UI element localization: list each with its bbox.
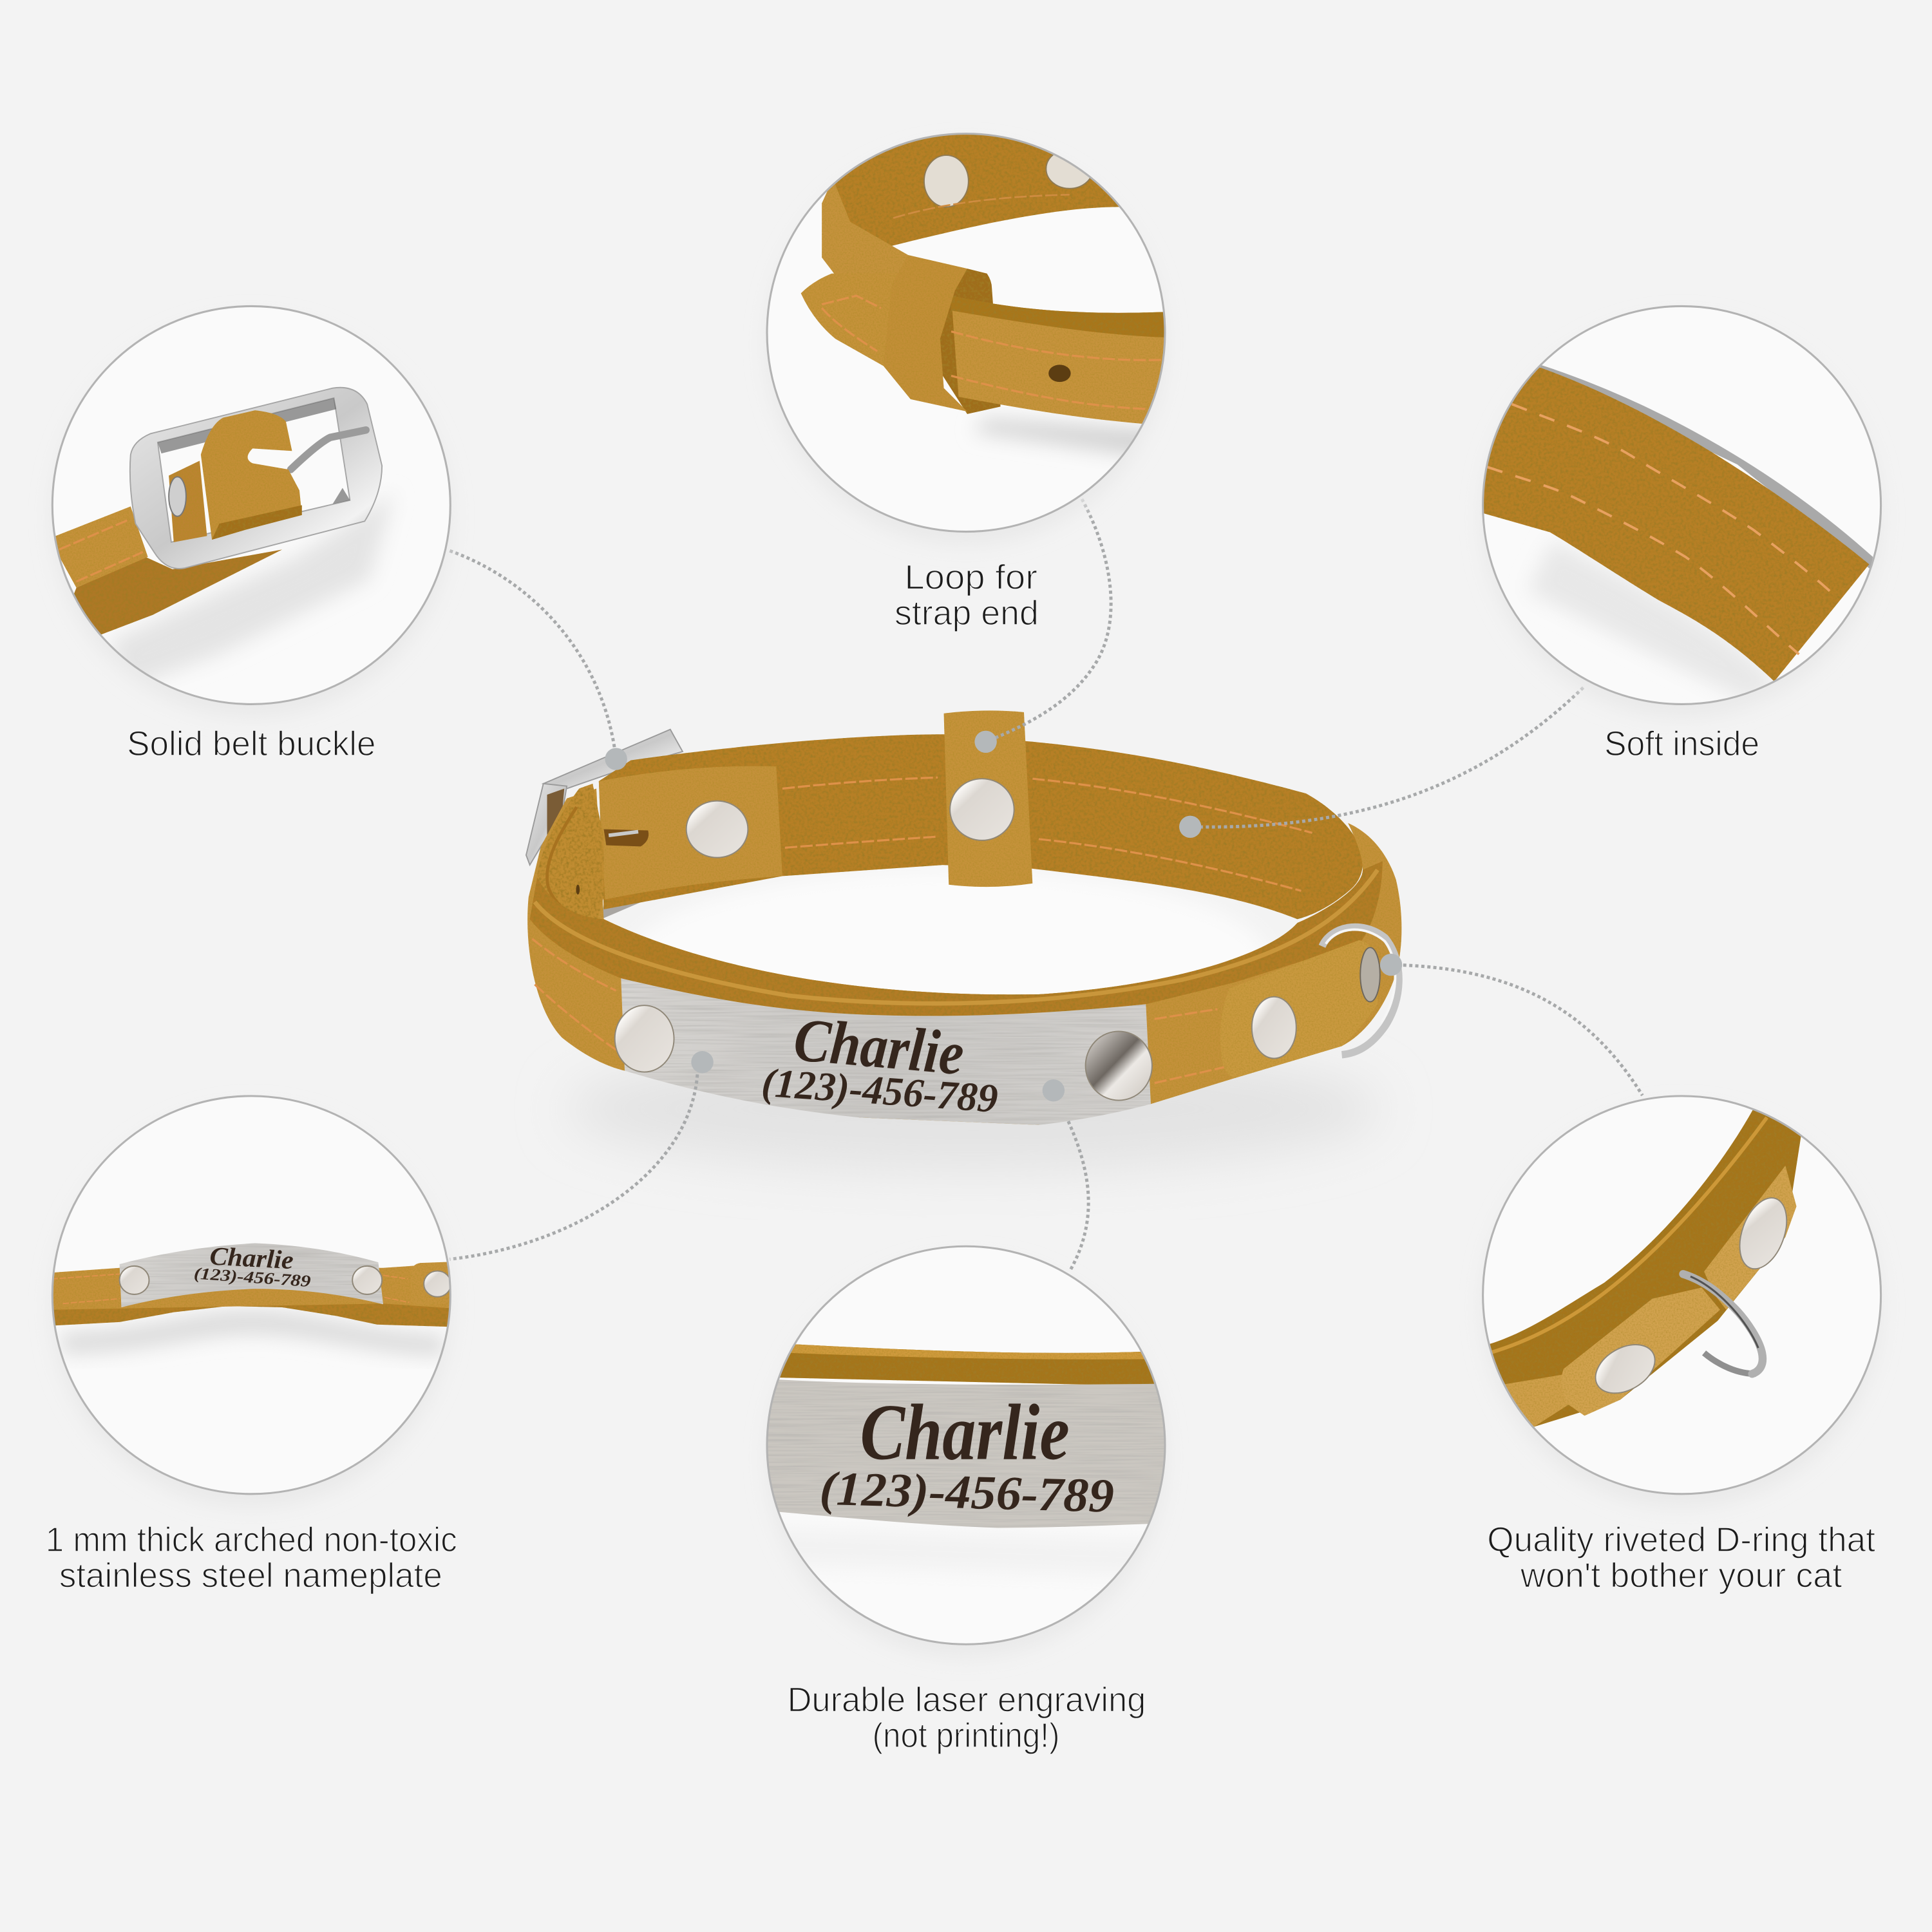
engraving photo: Charlie: [860, 1387, 1070, 1476]
left folded suede end: [537, 784, 604, 923]
connector: engraving: [1068, 1121, 1088, 1271]
label: buckle: Solid belt buckle: [127, 725, 376, 763]
connector: buckle: [450, 551, 616, 759]
circle outline: [767, 1246, 1165, 1644]
label: nameplate: stainless steel nameplate: [59, 1557, 442, 1595]
panel: loop detail: [766, 123, 1171, 545]
D-ring: [1322, 927, 1399, 1055]
label: loop: Loop for: [904, 559, 1037, 597]
circle base: [1482, 1096, 1882, 1507]
panel: D-ring detail: [1482, 1096, 1882, 1507]
label: engraving: (not printing!): [873, 1717, 1059, 1755]
connector: soft inside: [1190, 688, 1584, 827]
label: D-ring: Quality riveted D-ring that: [1487, 1521, 1875, 1559]
circle outline: [52, 1096, 450, 1494]
engraved phone: (123)-456-789: [760, 1060, 999, 1121]
label: nameplate: [46, 1521, 457, 1595]
collar floor shadow: [567, 869, 1380, 1171]
panel: buckle detail: [50, 306, 451, 717]
label: soft inside: Soft inside: [1604, 725, 1759, 763]
circle base: [52, 306, 451, 717]
circle base: [52, 1096, 451, 1507]
engraving photo: (123)-456-789: [819, 1463, 1115, 1523]
band bevel: [530, 861, 1383, 1016]
engraving photo: [768, 1344, 1164, 1528]
label: nameplate: 1 mm thick arched non-toxic: [46, 1521, 457, 1559]
nameplate photo: [50, 1241, 456, 1356]
panel: soft inside detail: [1472, 306, 1882, 717]
left leather tab: [599, 766, 782, 900]
rivet: plate left: [615, 1005, 674, 1072]
marker dots: [605, 731, 1402, 1101]
loop photo: [801, 123, 1171, 459]
circle base: [1482, 306, 1882, 717]
outer stitching: [533, 939, 1225, 1083]
inner stitching: [782, 777, 1312, 891]
circle outline: [1483, 306, 1881, 704]
outer front band: [527, 788, 1401, 1125]
right suede tab: [1220, 940, 1378, 1078]
steel plate: [621, 978, 1151, 1125]
engraved name: Charlie: [791, 1005, 967, 1088]
connector: loop: [986, 499, 1111, 742]
buckle seen from behind: [526, 730, 683, 919]
label: engraving: [788, 1681, 1146, 1755]
inner suede strap: [599, 734, 1363, 919]
panel: engraving detail: [764, 1246, 1171, 1657]
keeper loop: [944, 710, 1032, 887]
label: loop: strap end: [895, 594, 1039, 632]
D-ring photo: [1484, 1109, 1801, 1427]
label: D-ring: [1487, 1521, 1875, 1595]
suede photo: [1472, 365, 1873, 703]
nameplate: [615, 978, 1152, 1125]
circle base: [766, 134, 1166, 545]
label: engraving: Durable laser engraving: [788, 1681, 1146, 1719]
circle base: [766, 1246, 1166, 1657]
rivet: tab: [687, 801, 748, 858]
rivet: plate right: [1086, 1031, 1152, 1101]
rivet: right tab: [1252, 997, 1296, 1058]
rivet: keeper: [950, 779, 1014, 840]
panel: main collar: [526, 710, 1401, 1171]
nameplate photo: Charlie: [209, 1241, 294, 1274]
connector: D-ring: [1391, 965, 1642, 1095]
label: D-ring: won't bother your cat: [1520, 1557, 1842, 1595]
circle outline: [1483, 1096, 1881, 1494]
nameplate photo: (123)-456-789: [193, 1264, 311, 1291]
connector: nameplate: [450, 1074, 697, 1259]
circle outline: [52, 306, 450, 704]
D-ring inner bar: [1360, 947, 1380, 1001]
panel: nameplate detail: [50, 1096, 456, 1507]
circle outline: [767, 134, 1165, 532]
label: loop: [895, 559, 1039, 632]
buckle photo: [50, 388, 394, 690]
